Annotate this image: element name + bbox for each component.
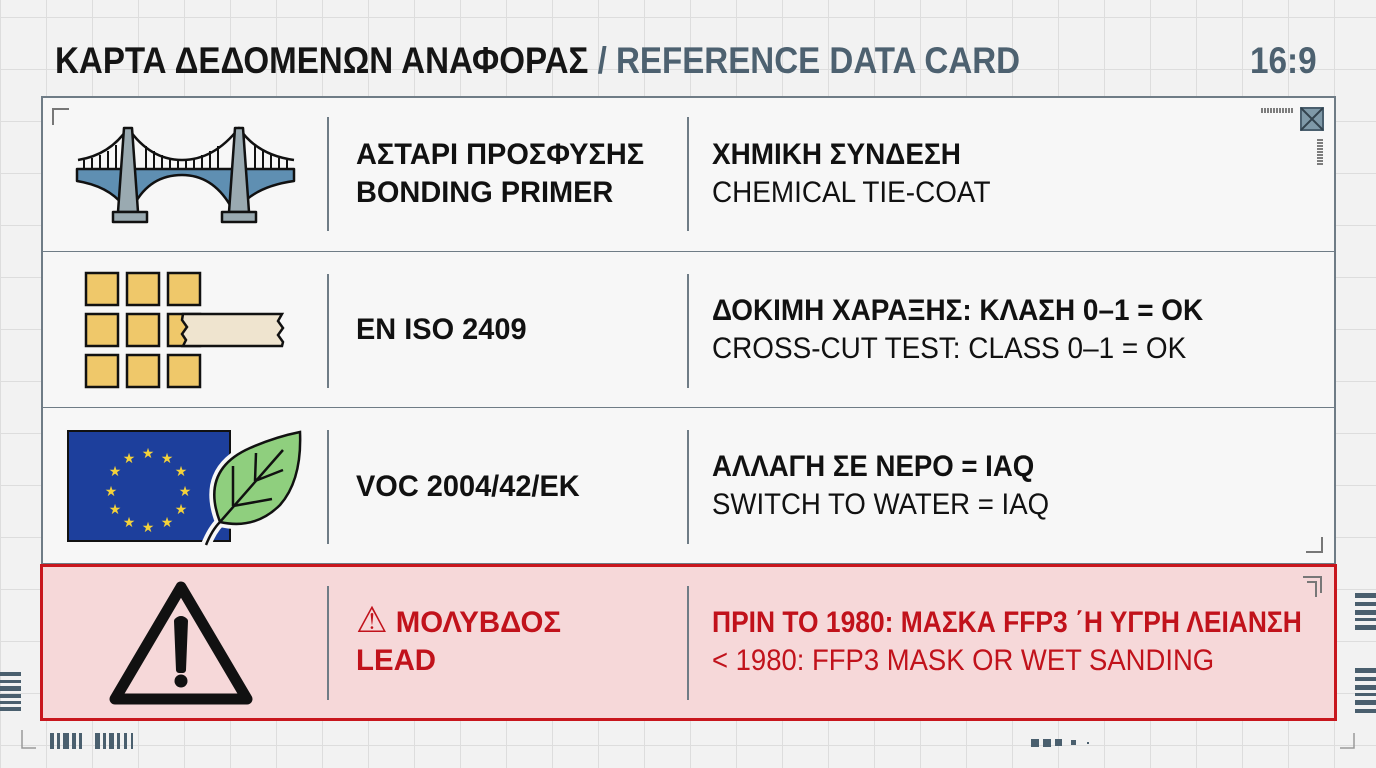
text: row 3 directive: VOC 2004/42/EK [356,470,580,503]
text: row 1 product [356,138,644,209]
panel: row 3 voc [41,408,1336,565]
text: row 1 product: BONDING PRIMER [356,176,613,209]
aspect label: 16:9 [1250,40,1317,81]
text: row 1 description [712,138,991,209]
icon: EU flag and leaf: ★ [123,450,135,466]
icon: EU flag and leaf: ★ [109,463,121,479]
text: row 1 description: CHEMICAL TIE-COAT [712,176,991,209]
icon: EU flag and leaf: ★ [109,501,121,517]
text: row 3 description: SWITCH TO WATER = IAQ [712,488,1049,521]
panel: row 4 lead warning [40,564,1337,721]
text: row 2 description: CROSS-CUT TEST: CLASS 0–1 = OK [712,332,1186,365]
text: row 4 warning: ΠΡΙΝ ΤΟ 1980: ΜΑΣΚΑ FFP3 ΄Η ΥΓΡΗ ΛΕΙΑΝΣΗ [712,606,1302,639]
text: row 1 description: ΧΗΜΙΚΗ ΣΥΝΔΕΣΗ [712,138,961,171]
text: row 4 lead: LEAD [356,644,436,677]
panel: row 2 cross-cut [41,252,1336,409]
icon: EU flag and leaf: ★ [161,514,173,530]
text: row 2 description [712,294,1203,365]
icon: EU flag and leaf: ★ [123,514,135,530]
icon: EU flag and leaf: ★ [161,450,173,466]
text: row 4 warning [712,606,1302,677]
text: row 4 warning: < 1980: FFP3 MASK OR WET SANDING [712,644,1214,677]
text: row 4 lead [356,599,561,677]
title: ΚΑΡΤΑ ΔΕΔΟΜΕΝΩΝ ΑΝΑΦΟΡΑΣ / REFERENCE DATA CARD [55,40,1020,81]
text: row 4 lead: ⚠ ΜΟΛΥΒΔΟΣ [356,599,561,640]
text: row 2 description: ΔΟΚΙΜΗ ΧΑΡΑΞΗΣ: ΚΛΑΣΗ 0–1 = OK [712,294,1203,327]
text: row 3 description [712,450,1049,521]
text: row 2 standard: EN ISO 2409 [356,313,527,346]
text: row 1 product: ΑΣΤΑΡΙ ΠΡΟΣΦΥΣΗΣ [356,138,644,171]
panel: row 1 bonding primer [41,96,1336,253]
icon: EU flag and leaf: ★ [142,445,154,461]
icon: EU flag and leaf: ★ [175,501,187,517]
text: row 3 description: ΑΛΛΑΓΗ ΣΕ ΝΕΡΟ = IAQ [712,450,1034,483]
icon: EU flag and leaf: ★ [142,519,154,535]
icon: EU flag and leaf: ★ [105,483,117,499]
icon: EU flag and leaf: ★ [175,463,187,479]
icon: EU flag and leaf: ★ [179,483,191,499]
